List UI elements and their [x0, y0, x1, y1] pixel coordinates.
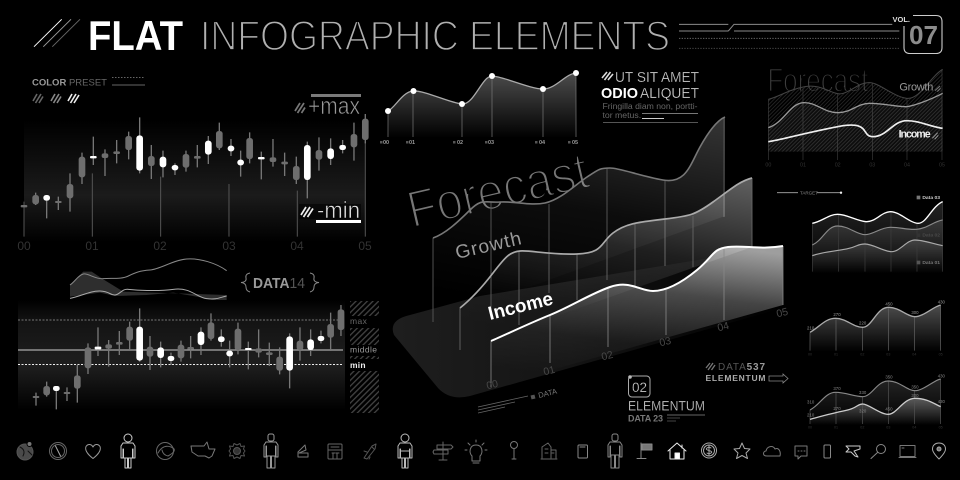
icon: tablet [578, 445, 588, 458]
value labels: 450 [885, 407, 893, 412]
line [810, 305, 941, 332]
chart labels: Growth [899, 82, 933, 94]
axis labels: 04 [539, 140, 546, 146]
min callout: -min [317, 197, 360, 223]
title: INFOGRAPHIC ELEMENTS [200, 12, 670, 59]
grid lines [768, 69, 942, 160]
chart labels: Income [899, 129, 931, 141]
panel: candlestick chart top [17, 114, 372, 253]
grid lines [810, 305, 941, 351]
axis labels: 04 [912, 352, 916, 356]
area fill [810, 305, 941, 352]
top line [768, 69, 943, 99]
text block: ut sit amet: Fringilla diam non, portti- [602, 101, 698, 111]
icon: city building [541, 443, 557, 459]
panel: labelled line chart [807, 299, 946, 356]
series labels: Data 03 [922, 195, 940, 201]
axis labels: 00 [765, 163, 771, 169]
data 14 label: DATA14 [253, 276, 305, 292]
icon: compass [50, 442, 66, 460]
isometric axis labels: 01 [542, 364, 557, 378]
chart background [24, 120, 365, 242]
element badge 02 [628, 375, 705, 424]
icon: woman two [398, 434, 412, 468]
series: forecast back [433, 117, 725, 322]
icon: magnifier [871, 444, 886, 458]
axis labels: 01 [834, 426, 838, 430]
max callout: +max [308, 93, 360, 120]
axis labels top: 01 [85, 239, 99, 253]
value labels: 430 [938, 373, 946, 378]
panel: top area chart [380, 70, 579, 146]
isometric base plate [393, 246, 783, 397]
grid lines [388, 73, 576, 137]
panel background [18, 300, 345, 410]
header rule lines [679, 24, 899, 48]
icon: megaphone [846, 446, 860, 457]
panel: candlestick chart with thresholds [18, 300, 379, 413]
axis labels [380, 140, 578, 146]
icon: woman one [121, 434, 135, 468]
data 537 callout [706, 362, 788, 383]
axis labels: 03 [869, 163, 875, 169]
series labels: Data 02 [922, 233, 940, 239]
value labels: 300 [911, 393, 919, 398]
icon: gear [229, 444, 245, 458]
value labels: 430 [938, 399, 946, 404]
icon: man two [608, 434, 622, 468]
value labels: 330 [859, 390, 867, 395]
value labels: 210 [807, 412, 815, 417]
element badge 02: ELEMENTUM [628, 398, 705, 414]
series labels [917, 195, 940, 266]
growth label: Growth [453, 228, 524, 264]
value labels: 210 [807, 326, 815, 331]
axis labels: 03 [886, 426, 890, 430]
icon: swirl circle [156, 442, 174, 460]
upper area [810, 379, 941, 425]
axis labels: 05 [939, 352, 943, 356]
axis labels: 00 [808, 426, 812, 430]
icon: man one [264, 434, 278, 468]
isometric axis labels: 02 [600, 349, 615, 363]
icon: dollar coin [702, 443, 716, 458]
icon: location pin [932, 443, 946, 459]
axis labels: 01 [800, 163, 806, 169]
series labels: Data 01 [922, 260, 940, 266]
isometric axis labels [485, 306, 790, 392]
target marker [777, 190, 842, 196]
axis labels top: 00 [17, 239, 31, 253]
volume badge: VOL. [892, 15, 910, 24]
data points [385, 70, 579, 114]
iso data caption: DATA [537, 387, 558, 400]
axis labels: 02 [860, 352, 864, 356]
axis labels: 05 [572, 140, 578, 146]
iso data caption [478, 387, 558, 413]
axis labels: 00 [383, 140, 389, 146]
icon: cloud [764, 447, 780, 456]
axis labels [808, 426, 943, 430]
icon: usa map [191, 442, 215, 458]
volume badge [892, 15, 942, 54]
value labels: 310 [807, 399, 815, 404]
icon: signpost [433, 442, 453, 460]
icon: rocket [364, 444, 376, 459]
title: FLAT [88, 12, 183, 59]
grid lines [810, 379, 941, 424]
icon: chat [795, 446, 807, 459]
axis labels: 02 [457, 140, 463, 146]
series: income [491, 246, 783, 387]
axis labels top [17, 239, 372, 253]
axis labels: 02 [835, 163, 841, 169]
wave lines [812, 202, 943, 256]
axis labels: 01 [834, 352, 838, 356]
data 14 label [241, 273, 319, 292]
income label: Income [486, 289, 555, 325]
isometric axis labels: 05 [775, 306, 790, 320]
wave areas [812, 202, 943, 273]
axis labels [765, 163, 945, 169]
income line [768, 121, 943, 142]
text block: ut sit amet: ALIQUET [640, 85, 699, 102]
volume badge: 07 [909, 20, 938, 50]
axis labels: 04 [912, 426, 916, 430]
icon: phone [824, 445, 830, 458]
text block: ut sit amet: tor metus. [602, 110, 641, 120]
isometric axis labels: 00 [485, 378, 500, 392]
icon: key [510, 442, 518, 459]
axis labels: 03 [886, 352, 890, 356]
value labels [807, 373, 946, 417]
isometric axis labels: 03 [658, 335, 673, 349]
icon: heart [86, 444, 100, 458]
icon: hand shape [298, 445, 308, 457]
grid lines [812, 202, 943, 272]
forecast label: Forecast [402, 142, 594, 240]
icon: laptop [899, 446, 916, 458]
color preset legend [32, 78, 145, 103]
text block: ut sit amet: UT SIT AMET [615, 69, 699, 86]
icon: bulb [465, 440, 487, 463]
text block: ut sit amet: ODIO [601, 85, 638, 102]
candlesticks lower [33, 305, 344, 409]
mini line chart [70, 259, 227, 307]
value labels: 300 [911, 310, 919, 315]
value labels: 350 [885, 375, 893, 380]
panel: forecast hatch chart [765, 63, 945, 169]
value labels: 350 [911, 384, 919, 389]
axis labels: 04 [904, 163, 910, 169]
data 537 callout: DATA537 [718, 362, 765, 373]
icon: star [734, 443, 750, 458]
axis labels: 03 [488, 140, 494, 146]
series: growth [460, 178, 752, 350]
threshold lines [18, 320, 343, 364]
chart labels [899, 82, 941, 141]
panel: double line chart [807, 373, 946, 430]
axis labels top: 02 [153, 239, 167, 253]
color preset legend: COLOR PRESET [32, 78, 107, 88]
isometric axis labels: 04 [716, 320, 731, 334]
icon row [17, 434, 946, 468]
hatch blocks and scale labels: middle [350, 344, 377, 354]
axis labels top: 04 [290, 239, 304, 253]
curve [388, 73, 576, 111]
lines [810, 379, 941, 419]
value labels: 450 [885, 301, 893, 306]
lower area [810, 398, 941, 425]
hatch blocks and scale labels [350, 301, 379, 413]
value labels: 430 [938, 299, 946, 304]
hatch area [768, 69, 943, 152]
value labels: 320 [859, 409, 867, 414]
panel: isometric forecast chart [393, 117, 790, 397]
text block: ut sit amet [601, 69, 699, 122]
header decorative slashes [34, 19, 80, 47]
value labels: 220 [859, 320, 867, 325]
target marker: TARGET [800, 190, 818, 196]
icon: flag [637, 443, 652, 458]
panel: three wave chart [812, 195, 943, 273]
icon: globe [17, 442, 33, 460]
axis labels: 02 [860, 426, 864, 430]
axis labels top: 05 [358, 239, 372, 253]
candlesticks top [21, 114, 369, 237]
axis labels: 01 [409, 140, 415, 146]
value labels: 270 [833, 312, 841, 317]
axis labels [808, 352, 943, 356]
data 537 callout: ELEMENTUM [706, 373, 766, 383]
forecast watermark: Forecast [767, 63, 869, 100]
value labels: 370 [833, 386, 841, 391]
axis labels top: 03 [222, 239, 236, 253]
hatch blocks and scale labels: min [350, 360, 366, 370]
icon: house [668, 443, 686, 459]
axis labels: 05 [939, 426, 943, 430]
hatch blocks and scale labels: max [350, 316, 368, 326]
value labels: 270 [833, 406, 841, 411]
area fill [388, 73, 576, 138]
element badge 02: DATA 23 [628, 414, 663, 424]
axis labels: 00 [808, 352, 812, 356]
value labels [807, 299, 946, 331]
growth area and line [768, 93, 943, 152]
icon: shop building [328, 444, 342, 459]
axis labels: 05 [939, 163, 945, 169]
element badge 02: 02 [632, 380, 647, 395]
